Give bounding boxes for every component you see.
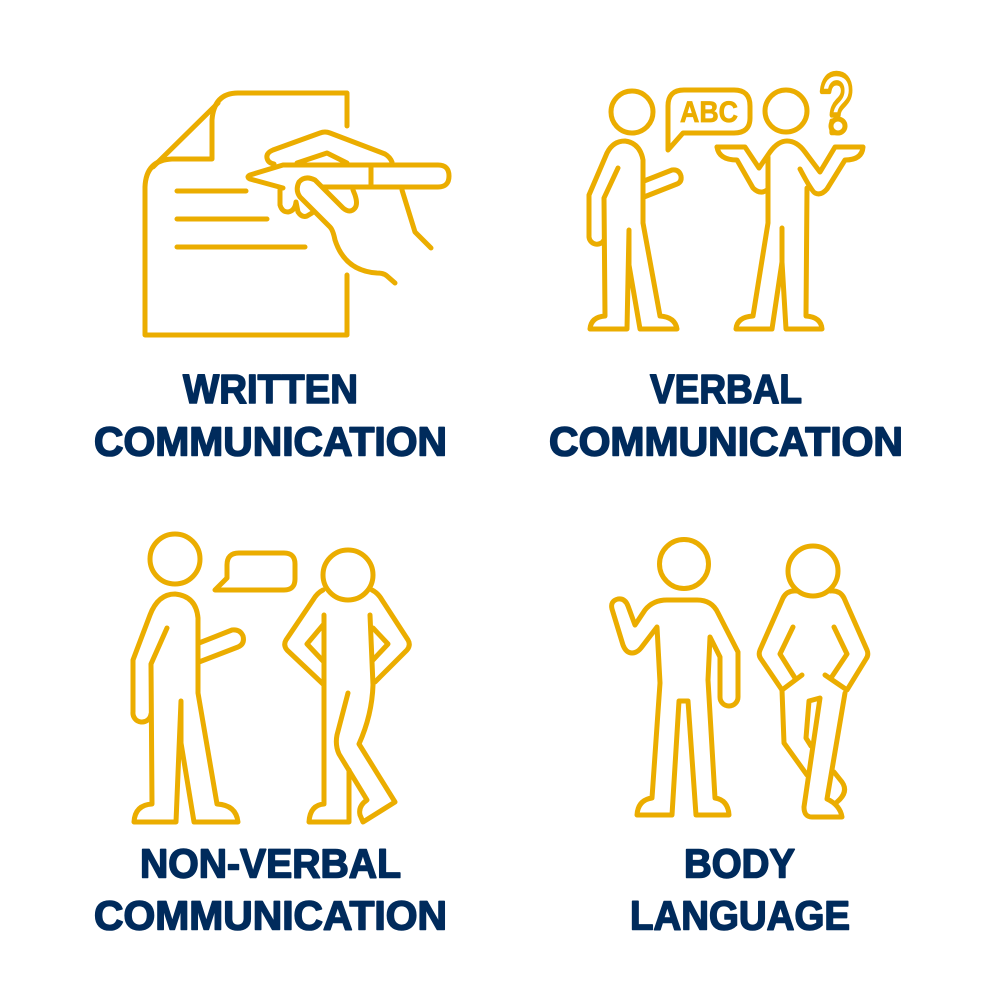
heading: body language [630,840,850,938]
heading: body language: BODY [684,840,795,886]
panel: verbal communication [549,58,903,464]
icon: gesturing person with empty speech bubble [133,534,295,822]
icon: document with hand and pen [145,93,449,335]
heading: verbal communication [549,366,903,464]
icon: shrugging person [717,90,863,329]
icon: person with hands on hips [285,550,409,822]
heading: written communication: COMMUNICATION [94,418,447,464]
heading: written communication: WRITTEN [183,366,358,412]
icon: question mark: ? [819,58,854,151]
heading: verbal communication: VERBAL [650,366,802,412]
text: ABC in speech bubble: ABC [680,96,738,129]
heading: non-verbal communication [94,840,447,938]
heading: non-verbal communication: COMMUNICATION [94,892,447,938]
panel: written communication [94,93,449,464]
icon: person with hands in pockets [759,546,868,817]
icon: waving person [612,540,738,815]
heading: written communication [94,366,447,464]
heading: non-verbal communication: NON-VERBAL [140,840,401,886]
heading: verbal communication: COMMUNICATION [549,418,903,464]
icon: speaker with ABC speech bubble [589,90,750,329]
panel: body language [612,540,868,938]
panel: non-verbal communication [94,534,447,938]
heading: body language: LANGUAGE [630,892,850,938]
